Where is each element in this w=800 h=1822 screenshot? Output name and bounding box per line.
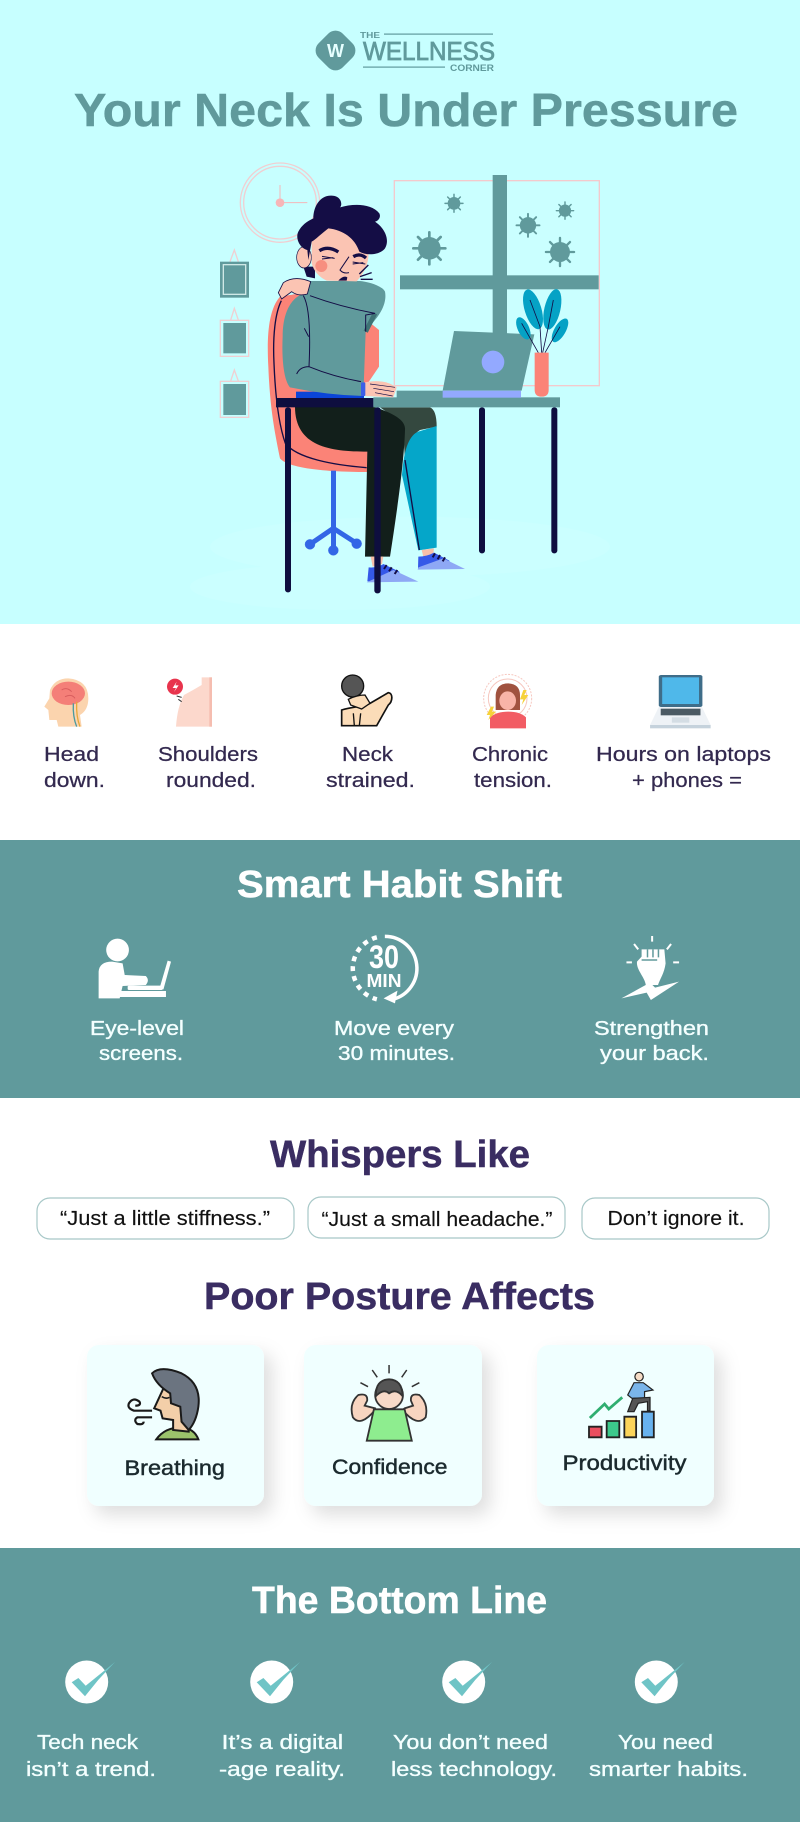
text: head down: Head <box>44 744 99 766</box>
heading: whispers like: Whispers Like <box>270 1134 530 1176</box>
icon: person exhaling <box>128 1369 199 1439</box>
text: tech neck: Tech neck <box>37 1732 139 1754</box>
viruses outside window <box>413 194 574 266</box>
icon: 30 minute timer: MIN <box>366 971 402 991</box>
text: smarter habits <box>589 1732 748 1781</box>
icon: person at laptop <box>99 939 171 998</box>
check icon 2 <box>250 1660 300 1704</box>
text: strengthen your back: Strengthen <box>594 1018 709 1040</box>
wall frame 3 <box>220 370 249 417</box>
text: head down <box>44 744 105 792</box>
text: less technology: less technology. <box>391 1759 557 1781</box>
label: Confidence <box>332 1456 448 1479</box>
icon: climbing growth chart <box>589 1372 654 1437</box>
text: less technology: You don’t need <box>393 1732 548 1754</box>
card: breathing <box>87 1345 264 1506</box>
text: less technology <box>391 1732 557 1781</box>
text: hours on laptops: + phones = <box>632 770 742 792</box>
logo: The Wellness Corner: CORNER <box>450 63 495 73</box>
pill: don't ignore it <box>582 1198 769 1239</box>
text: neck strained <box>326 744 415 792</box>
wall clock <box>240 163 320 242</box>
heading: poor posture affects: Poor Posture Affects <box>204 1276 595 1318</box>
logo: The Wellness Corner <box>311 26 495 75</box>
plant in vase <box>513 287 572 397</box>
logo: The Wellness Corner: THE <box>360 30 380 40</box>
text: eye-level screens <box>90 1018 184 1065</box>
text: digital-age reality: It’s a digital <box>222 1732 343 1754</box>
wall frame 1 <box>220 250 249 298</box>
icon: 30 minute timer <box>353 936 417 1003</box>
title: Your Neck Is Under Pressure <box>74 84 738 136</box>
text: chronic tension: tension. <box>474 770 552 792</box>
text: digital-age reality <box>219 1732 345 1781</box>
text: shoulders rounded: Shoulders <box>158 744 258 766</box>
text: shoulders rounded <box>158 744 258 792</box>
panel: symptoms row <box>0 624 800 840</box>
text: hours on laptops <box>596 744 771 792</box>
text: smarter habits: smarter habits. <box>589 1759 748 1781</box>
text: shoulders rounded: rounded. <box>166 770 256 792</box>
text: digital-age reality: -age reality. <box>219 1759 345 1781</box>
check icon 3 <box>442 1660 492 1704</box>
hand on shoulder <box>278 279 311 299</box>
heading: Smart Habit Shift <box>237 864 562 906</box>
illustration: man at desk coughing <box>190 163 610 610</box>
card: confidence <box>304 1345 482 1506</box>
icon: tension headache <box>484 674 532 728</box>
icon: strained neck <box>342 675 392 726</box>
text: chronic tension <box>472 744 552 792</box>
pill: small headache <box>308 1197 565 1238</box>
label: Breathing <box>124 1457 225 1480</box>
text: hours on laptops: Hours on laptops <box>596 744 771 766</box>
text: tech neck <box>26 1732 156 1781</box>
text: smarter habits: You need <box>618 1732 713 1754</box>
text: chronic tension: Chronic <box>472 744 548 766</box>
text: neck strained: Neck <box>342 744 394 766</box>
panel: the bottom line <box>0 1548 800 1822</box>
icon: sore shoulder <box>167 677 212 727</box>
pill: small headache: “Just a small headache.” <box>322 1209 552 1231</box>
icon: brain in head <box>44 678 88 727</box>
text: tech neck: isn’t a trend. <box>26 1759 156 1781</box>
chair base <box>305 471 362 555</box>
text: eye-level screens: Eye-level <box>90 1018 184 1040</box>
hand on desk <box>361 381 397 397</box>
pill: don't ignore it: Don’t ignore it. <box>608 1208 744 1230</box>
check icon 1 <box>65 1660 115 1704</box>
blue shirt strip <box>296 392 364 398</box>
icon: flexing person <box>352 1365 426 1441</box>
logo: The Wellness Corner: W <box>327 41 344 61</box>
laptop <box>443 331 534 398</box>
ground shadows <box>190 517 610 610</box>
wall frame 2 <box>220 308 249 356</box>
text: neck strained: strained. <box>326 770 415 792</box>
desk top <box>276 391 560 407</box>
label: Productivity <box>562 1452 687 1475</box>
panel: smart habit shift <box>0 840 800 1098</box>
text: move every 30 minutes: 30 minutes. <box>338 1043 455 1065</box>
icon: raised fist <box>621 936 679 1000</box>
chair <box>268 293 379 472</box>
logo: The Wellness Corner: WELLNESS <box>363 36 495 66</box>
window <box>394 175 599 386</box>
pill: little stiffness <box>37 1198 294 1239</box>
heading: The Bottom Line <box>252 1580 547 1622</box>
head and hair <box>297 196 387 281</box>
near leg and shoe <box>295 407 418 582</box>
text: move every 30 minutes: Move every <box>334 1018 454 1040</box>
icon: 30 minute timer: 30 <box>369 939 399 975</box>
text: eye-level screens: screens. <box>99 1043 183 1065</box>
pill: little stiffness: “Just a little stiffness.” <box>60 1208 270 1230</box>
far leg and shoe <box>380 407 465 570</box>
card: productivity <box>537 1345 714 1506</box>
text: head down: down. <box>44 770 105 792</box>
text: move every 30 minutes <box>334 1018 455 1065</box>
desk legs <box>285 407 557 593</box>
panel: hero background <box>0 0 800 624</box>
text: strengthen your back <box>594 1018 709 1065</box>
text: strengthen your back: your back. <box>600 1043 709 1065</box>
sweater torso and raised arm <box>282 281 385 396</box>
icon: laptop <box>650 675 711 728</box>
check icon 4 <box>635 1660 685 1704</box>
